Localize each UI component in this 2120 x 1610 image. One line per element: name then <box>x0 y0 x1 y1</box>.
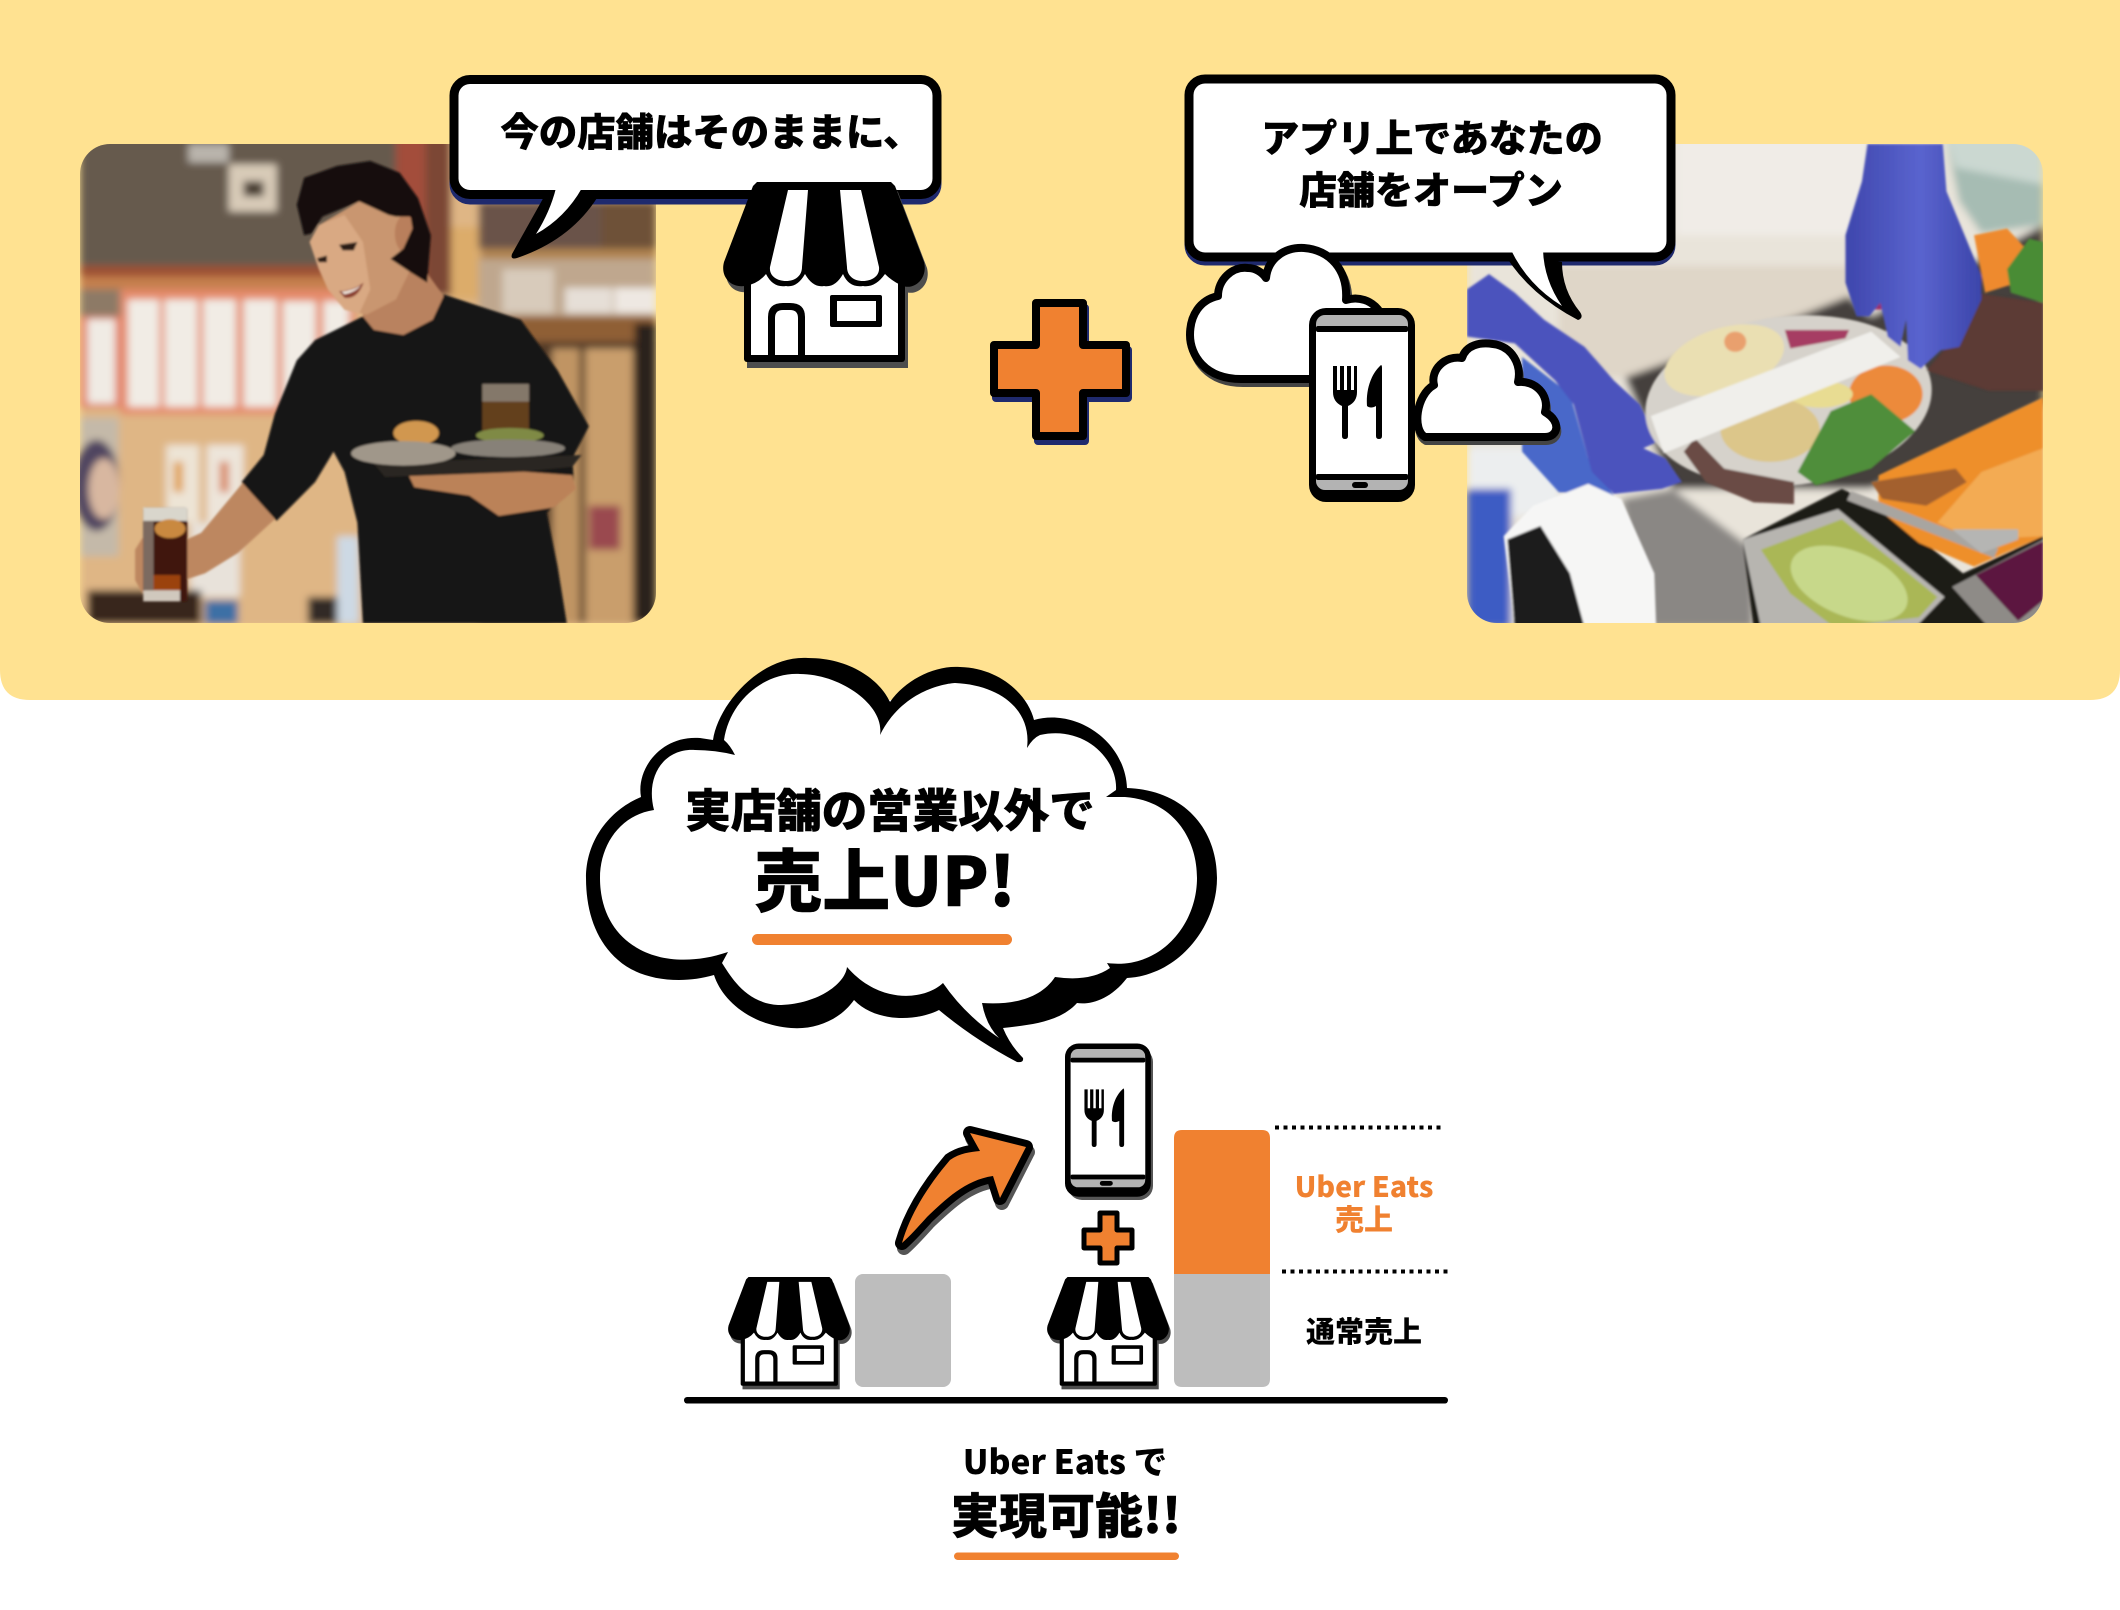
icon: smartphone small <box>1065 1044 1153 1200</box>
label: Uber Eats sales: Uber Eats <box>1295 1165 1433 1206</box>
neck <box>363 266 444 335</box>
label: Uber Eats sales: 売上 <box>1335 1197 1393 1239</box>
eyes and mouth <box>317 242 364 298</box>
ear <box>395 215 415 252</box>
tray <box>374 455 582 477</box>
photo: gloved hands packing salad bowl <box>1467 134 2043 637</box>
bar: normal sales, before <box>855 1274 951 1387</box>
icon: small orange plus <box>1084 1213 1132 1263</box>
icon: big orange plus <box>994 303 1128 441</box>
face <box>310 201 412 315</box>
cloud heading line 2: 売上UP! <box>754 827 1016 926</box>
icon: left cloud <box>1190 248 1382 383</box>
callout: speech bubble, store stays as is <box>454 80 937 258</box>
bar: stacked sales, after <box>1174 1130 1270 1387</box>
label: Uber Eats sales <box>1295 1165 1433 1239</box>
bubble text: 今の店舗はそのままに、 <box>500 102 922 158</box>
dark tray base <box>1743 489 2043 627</box>
arm <box>135 482 275 594</box>
hair <box>297 161 431 283</box>
bubble text: アプリ上であなたの <box>1261 108 1603 163</box>
closing underline <box>954 1552 1179 1560</box>
closing heading: 実現可能!! <box>951 1477 1181 1547</box>
glass on tray <box>482 384 529 435</box>
dispenser blue body <box>1522 357 1614 496</box>
chart baseline <box>684 1397 1448 1404</box>
orange carrot tray <box>1849 398 2043 567</box>
label: normal sales: 通常売上 <box>1306 1309 1422 1351</box>
icon: storefront small right <box>1047 1277 1171 1389</box>
side ingredients <box>1875 228 2043 391</box>
panel: yellow top background <box>0 0 2120 700</box>
shirt <box>242 293 589 623</box>
callout: speech bubble, open store on the app <box>1189 79 1671 320</box>
left glove <box>1467 274 1682 494</box>
bubble text: 店舗をオープン <box>1299 160 1563 215</box>
icon: storefront small left <box>728 1277 852 1389</box>
icon: storefront large <box>723 182 928 368</box>
glass in hand <box>143 507 187 601</box>
right glove <box>1845 144 1981 369</box>
icon: smartphone with fork and knife large <box>1309 308 1415 502</box>
icon: right cloud <box>1417 343 1557 441</box>
cloud heading line 1: 実店舗の営業以外で <box>685 775 1095 841</box>
tape roll <box>1504 484 1656 627</box>
food and plates <box>351 421 565 465</box>
callout: big cloud bubble <box>586 658 1217 1062</box>
photo: waiter serving drinks in a restaurant <box>74 134 656 627</box>
arrow: orange curved up arrow <box>902 1133 1028 1248</box>
cloud heading underline <box>752 934 1012 945</box>
plum tray <box>1952 540 2043 627</box>
green cucumber tray <box>1743 509 1945 637</box>
bubble text <box>1261 108 1603 215</box>
tray hand <box>407 469 576 516</box>
closing text: possible with Uber Eats: Uber Eats で <box>963 1435 1167 1484</box>
salad bowl <box>1644 314 1934 506</box>
